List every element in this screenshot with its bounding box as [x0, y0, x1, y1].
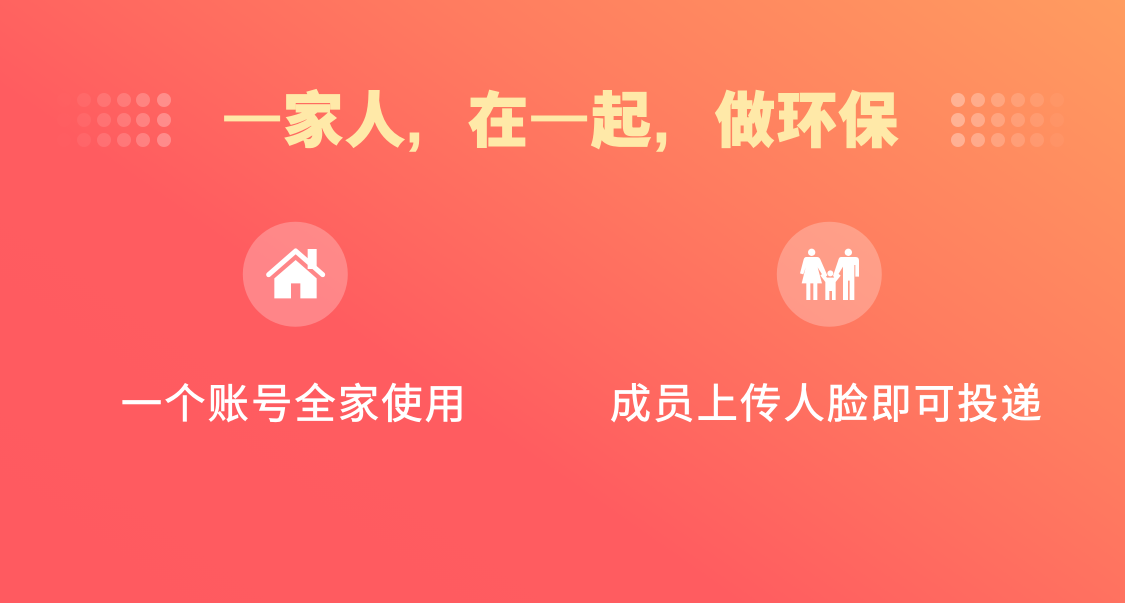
- title: 家: [283, 88, 343, 155]
- title: 环: [777, 88, 837, 155]
- title: 在: [468, 88, 528, 155]
- decorative dot grid: left: [57, 93, 171, 147]
- title: ,: [653, 88, 670, 155]
- title: 保: [838, 88, 898, 155]
- icon: family in circle: [777, 222, 882, 327]
- icon: house in circle: [243, 222, 348, 327]
- decorative dot grid: right: [951, 93, 1064, 147]
- title: 一: [529, 88, 589, 155]
- title: 人: [345, 88, 405, 155]
- label: members upload face to deliver: 成员上传人脸即可投递: [610, 381, 1044, 427]
- label: one account for the whole family: 一个账号全家使用: [121, 381, 468, 427]
- title: 起: [591, 88, 651, 155]
- title: 做: [715, 88, 775, 155]
- title: ,: [406, 88, 423, 155]
- title: 一: [222, 88, 282, 155]
